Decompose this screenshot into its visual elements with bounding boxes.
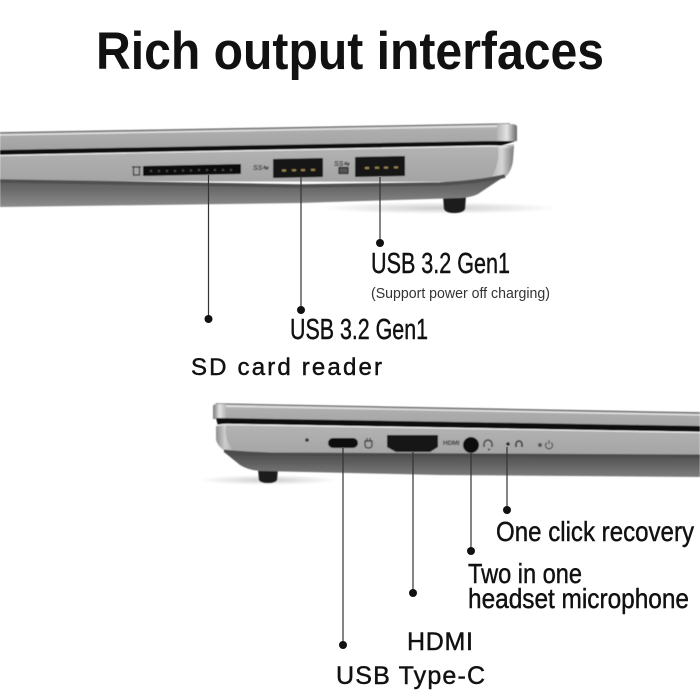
USB Type-C port: [328, 438, 358, 448]
HDMI label: HDMI: [443, 440, 460, 447]
callout: HDMI: HDMI: [407, 628, 473, 656]
upper laptop lid: [0, 124, 517, 151]
lower laptop base: [216, 424, 700, 456]
icon: recovery arrow: [516, 441, 522, 447]
callout: USB 3.2 Gen1 left: USB 3.2 Gen1: [290, 314, 428, 346]
callout: USB 3.2 Gen1 right with note: USB 3.2 Gen1: [371, 248, 510, 280]
upper laptop base: [0, 144, 514, 182]
icon: USB SS and battery symbol: SS⇋: [334, 161, 350, 168]
lower laptop foot: [258, 469, 278, 483]
callout: USB Type-C: USB Type-C: [336, 662, 485, 690]
status LED: [305, 438, 309, 442]
shadow beneath upper laptop: [320, 202, 560, 214]
callout: HDMI: [407, 452, 473, 656]
callout: SD card reader: [191, 175, 382, 381]
icon: headset: [484, 440, 492, 450]
icon: USB SS symbol: SS⇋: [253, 165, 269, 172]
upper laptop: side view with ports: [0, 124, 560, 214]
audio jack: [463, 437, 479, 453]
lower laptop underside: [224, 452, 700, 477]
icon: SD card symbol: [132, 167, 141, 175]
upper laptop underside: [0, 176, 505, 207]
callout: SD card reader: SD card reader: [191, 354, 382, 381]
lower laptop lid: [213, 404, 700, 431]
callout: USB Type-C: [336, 448, 485, 690]
callout: Two in one headset microphone: Two in one: [468, 558, 582, 589]
callout: Two in one headset microphone: [467, 453, 689, 614]
upper laptop foot: [443, 196, 466, 213]
HDMI port: [387, 435, 438, 452]
icon: power: [546, 440, 552, 449]
recovery pinhole: [506, 442, 510, 446]
callout: USB 3.2 Gen1 right with note: (Support power off charging): [371, 285, 550, 302]
callout: One click recovery: [496, 447, 694, 547]
lower laptop hinge gap: [216, 418, 700, 432]
icon: power plug: [365, 438, 372, 448]
shadow beneath lower laptop: [198, 475, 338, 485]
title: Rich output interfaces: [96, 22, 604, 81]
callout: USB 3.2 Gen1 right with note: [371, 177, 550, 302]
lower laptop: side view with ports: [198, 404, 700, 485]
USB port right: [355, 156, 405, 177]
icon: USB SS and battery symbol: [334, 161, 350, 174]
upper laptop hinge gap: [0, 141, 516, 156]
power LED: [538, 443, 542, 447]
SD card slot: [143, 164, 241, 176]
USB port left: [273, 158, 323, 178]
callout: USB 3.2 Gen1 left: [290, 177, 428, 346]
